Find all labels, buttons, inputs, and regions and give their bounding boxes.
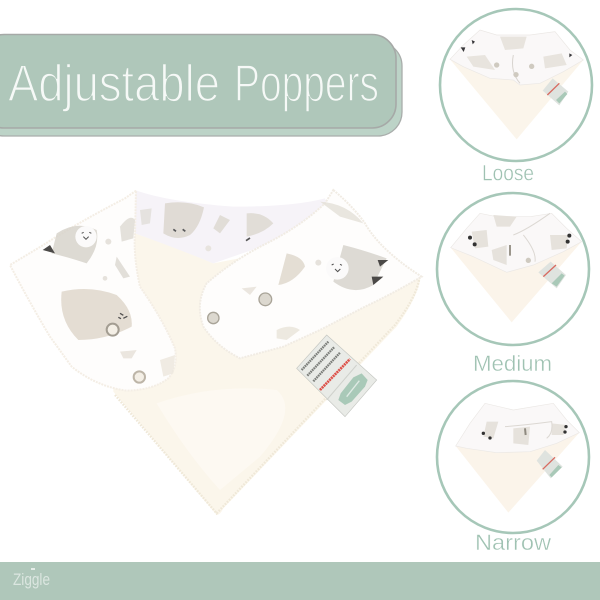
brand name: Ziggle	[13, 570, 50, 589]
right flap popper 2	[208, 312, 219, 324]
footer bar	[0, 562, 600, 600]
cream bib body	[113, 233, 421, 515]
circle frame	[437, 193, 589, 345]
left flap popper 1	[107, 324, 119, 336]
tag	[543, 78, 568, 105]
bib	[450, 30, 583, 139]
right flap popper 1	[259, 293, 272, 306]
body stitched edge	[115, 278, 419, 513]
thumbnail: Loose	[440, 9, 592, 186]
main bib photo	[10, 190, 422, 515]
circle frame	[437, 381, 589, 533]
care label	[297, 335, 377, 417]
circle frame	[440, 9, 592, 161]
neck print	[140, 202, 273, 251]
neck lining	[135, 190, 333, 263]
left flap	[10, 191, 176, 391]
banner: Adjustable Poppers	[0, 34, 402, 136]
label text: Narrow	[475, 530, 551, 555]
heading	[8, 55, 379, 113]
heading: Adjustable	[8, 55, 220, 113]
banner front layer	[0, 34, 396, 128]
label text: Loose	[482, 160, 534, 186]
thumbnail: Medium	[437, 193, 589, 376]
right flap	[200, 190, 422, 358]
right flap print	[242, 202, 388, 340]
heading: Poppers	[234, 55, 379, 113]
brand mark	[31, 568, 35, 570]
thumbnail: Narrow	[437, 381, 589, 555]
left flap print	[43, 218, 175, 377]
label logo	[338, 373, 368, 405]
bib	[456, 403, 579, 513]
tag	[538, 262, 566, 288]
banner back layer	[0, 42, 402, 136]
bib	[451, 213, 582, 322]
left flap popper 2	[134, 371, 145, 383]
tag	[537, 450, 563, 478]
soft shading on body	[157, 388, 285, 490]
label text: Medium	[473, 351, 552, 376]
